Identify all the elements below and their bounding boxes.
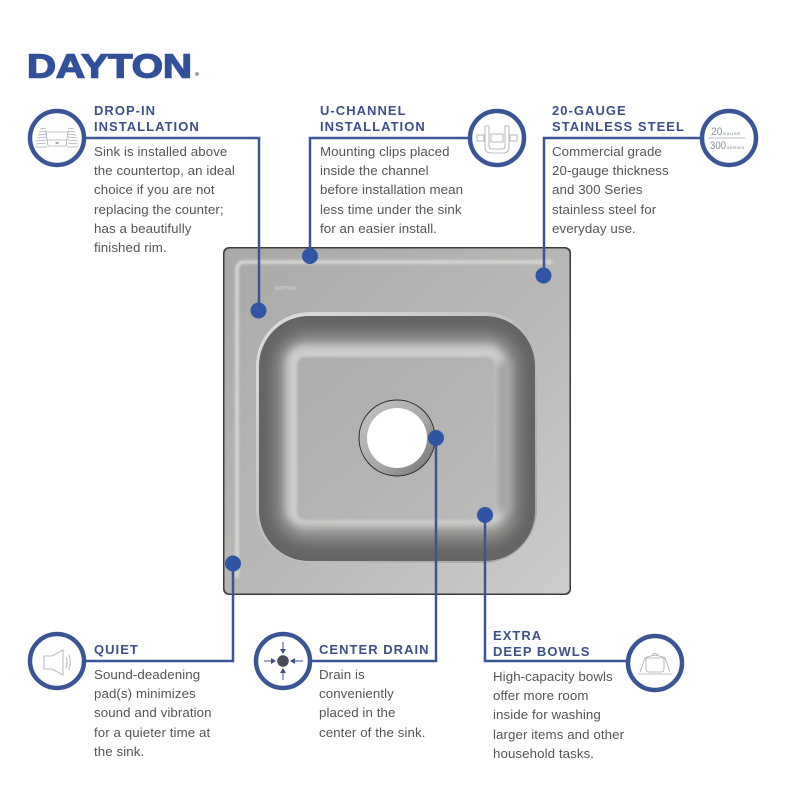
sink photo: DAYTON bbox=[275, 286, 296, 292]
text: u-channel installation: inside the channel bbox=[320, 163, 429, 178]
text: drop-in installation: DROP-IN bbox=[94, 103, 156, 118]
text: u-channel installation bbox=[320, 103, 463, 236]
text: 20-gauge stainless steel: 20-gauge thickness bbox=[552, 163, 669, 178]
text: drop-in installation: finished rim. bbox=[94, 240, 167, 255]
connector: quiet bbox=[60, 556, 241, 661]
text: u-channel installation: Mounting clips placed bbox=[320, 144, 450, 159]
text: 20-gauge stainless steel: Commercial grade bbox=[552, 144, 662, 159]
text: extra deep bowls: inside for washing bbox=[493, 707, 601, 722]
connector: extra deep bowls bbox=[477, 507, 655, 661]
text: quiet: the sink. bbox=[94, 744, 144, 759]
icon: drop-in installation bbox=[30, 111, 84, 165]
text: quiet: Sound-deadening bbox=[94, 667, 200, 682]
connector: drop-in bbox=[60, 138, 266, 318]
text: drop-in installation: choice if you are not bbox=[94, 182, 215, 197]
text: drop-in installation: has a beautifully bbox=[94, 221, 192, 236]
text: u-channel installation: before installation mean bbox=[320, 182, 463, 197]
text: extra deep bowls: larger items and other bbox=[493, 727, 625, 742]
icon: 20 gauge 300 series: SERIES bbox=[727, 146, 744, 150]
text: 20-gauge stainless steel: and 300 Series bbox=[552, 182, 643, 197]
text: extra deep bowls: High-capacity bowls bbox=[493, 669, 613, 684]
text: quiet: QUIET bbox=[94, 642, 139, 657]
text: 20-gauge stainless steel: stainless steel for bbox=[552, 202, 657, 217]
text: center drain: center of the sink. bbox=[319, 725, 425, 740]
text: 20-gauge stainless steel: STAINLESS STEEL bbox=[552, 119, 685, 134]
text: drop-in installation bbox=[94, 103, 235, 255]
text: center drain bbox=[319, 642, 430, 740]
text: center drain: placed in the bbox=[319, 705, 395, 720]
text: 20-gauge stainless steel: everyday use. bbox=[552, 221, 636, 236]
text: extra deep bowls: DEEP BOWLS bbox=[493, 644, 590, 659]
text: extra deep bowls: EXTRA bbox=[493, 628, 542, 643]
icon: 20 gauge 300 series bbox=[702, 111, 756, 165]
text: u-channel installation: less time under the sink bbox=[320, 202, 462, 217]
text: quiet: sound and vibration bbox=[94, 705, 212, 720]
text: 20-gauge stainless steel bbox=[552, 103, 685, 236]
text: center drain: CENTER DRAIN bbox=[319, 642, 430, 657]
connector: 20-gauge bbox=[536, 138, 720, 284]
text: drop-in installation: replacing the counter; bbox=[94, 202, 224, 217]
icon: speaker bbox=[30, 634, 84, 688]
text: drop-in installation: INSTALLATION bbox=[94, 119, 200, 134]
text: extra deep bowls bbox=[493, 628, 625, 761]
logo: Dayton: DAYTON bbox=[27, 48, 192, 84]
sink photo bbox=[223, 247, 571, 595]
connector: center drain bbox=[285, 430, 444, 661]
text: quiet bbox=[94, 642, 212, 759]
icon: 20 gauge 300 series: GAUGE bbox=[723, 132, 740, 136]
icon: deep bowl bbox=[628, 636, 682, 690]
icon: 20 gauge 300 series: 20 bbox=[711, 126, 722, 138]
icon: center drain bbox=[256, 634, 310, 688]
text: quiet: pad(s) minimizes bbox=[94, 686, 196, 701]
connector: u-channel bbox=[302, 138, 500, 264]
text: extra deep bowls: offer more room bbox=[493, 688, 589, 703]
icon: u-channel bbox=[470, 111, 524, 165]
text: center drain: conveniently bbox=[319, 686, 394, 701]
text: u-channel installation: for an easier install. bbox=[320, 221, 437, 236]
text: u-channel installation: U-CHANNEL bbox=[320, 103, 407, 118]
text: drop-in installation: the countertop, an ideal bbox=[94, 163, 235, 178]
text: center drain: Drain is bbox=[319, 667, 365, 682]
text: drop-in installation: Sink is installed above bbox=[94, 144, 227, 159]
text: u-channel installation: INSTALLATION bbox=[320, 119, 426, 134]
text: quiet: for a quieter time at bbox=[94, 725, 210, 740]
text: extra deep bowls: household tasks. bbox=[493, 746, 594, 761]
text: 20-gauge stainless steel: 20-GAUGE bbox=[552, 103, 627, 118]
icon: 20 gauge 300 series: 300 bbox=[710, 140, 726, 152]
